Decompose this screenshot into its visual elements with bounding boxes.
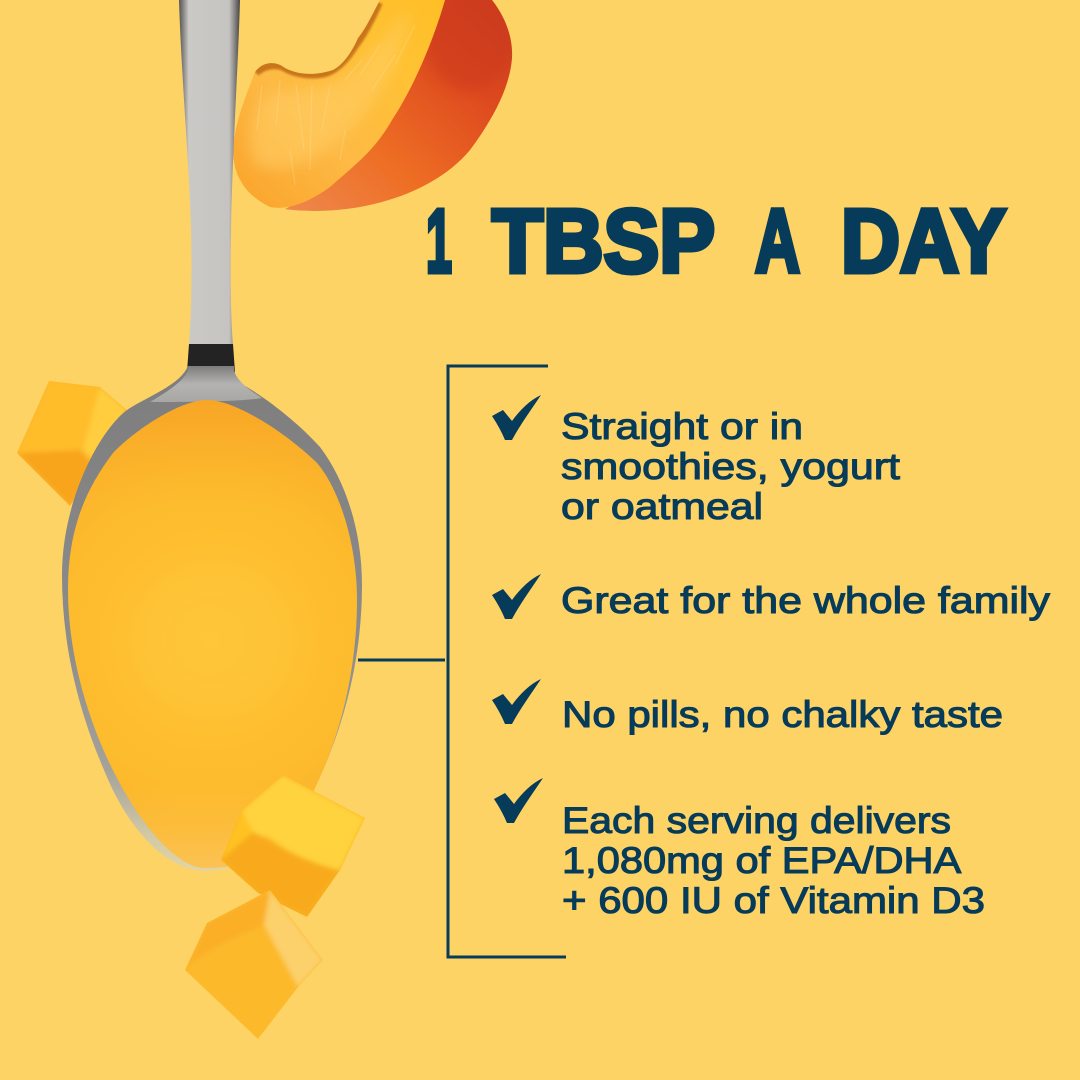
- icon: check: [492, 679, 541, 724]
- peach flesh: [230, 0, 450, 215]
- peach slice: [230, 0, 520, 215]
- text: serving contents: Each serving delivers: [562, 800, 951, 841]
- title: TBSP: [492, 192, 715, 292]
- title: DAY: [841, 192, 1006, 292]
- spoon collar: [150, 366, 262, 402]
- peach pit edge: [255, 2, 378, 73]
- spoon neck: [187, 344, 235, 372]
- text: serving ideas: or oatmeal: [561, 486, 763, 527]
- mango cube: bottom: [185, 890, 323, 1039]
- oil shading: [68, 400, 357, 868]
- icon: check: [492, 395, 541, 440]
- peach flesh fibres: [257, 25, 415, 185]
- spoon handle: [179, 0, 240, 345]
- item 4: [494, 778, 985, 921]
- bracket connector: [358, 366, 566, 957]
- title: A: [755, 192, 800, 292]
- text: serving contents: + 600 IU of Vitamin D3: [562, 880, 985, 921]
- mango cube: on spoon: [221, 776, 365, 917]
- spoon bowl rim: [62, 366, 362, 871]
- title: [426, 192, 1006, 292]
- icon: check: [492, 574, 541, 619]
- text: serving ideas: Straight or in: [561, 406, 803, 447]
- text: no pills: No pills, no chalky taste: [562, 694, 1003, 735]
- text: serving ideas: smoothies, yogurt: [561, 446, 901, 487]
- text: family: Great for the whole family: [561, 580, 1051, 621]
- oil swirl: [130, 560, 300, 720]
- spoon: [62, 0, 362, 871]
- title: 1: [426, 192, 452, 292]
- item 2: [492, 574, 1051, 621]
- text: serving contents: 1,080mg of EPA/DHA: [562, 840, 962, 881]
- benefits list: [492, 395, 1051, 921]
- item 3: [492, 679, 1003, 735]
- icon: check: [494, 778, 543, 823]
- oil in bowl: [68, 400, 357, 868]
- mango cube: upper left: [17, 381, 127, 506]
- item 1: [492, 395, 910, 527]
- peach skin: [280, 0, 520, 215]
